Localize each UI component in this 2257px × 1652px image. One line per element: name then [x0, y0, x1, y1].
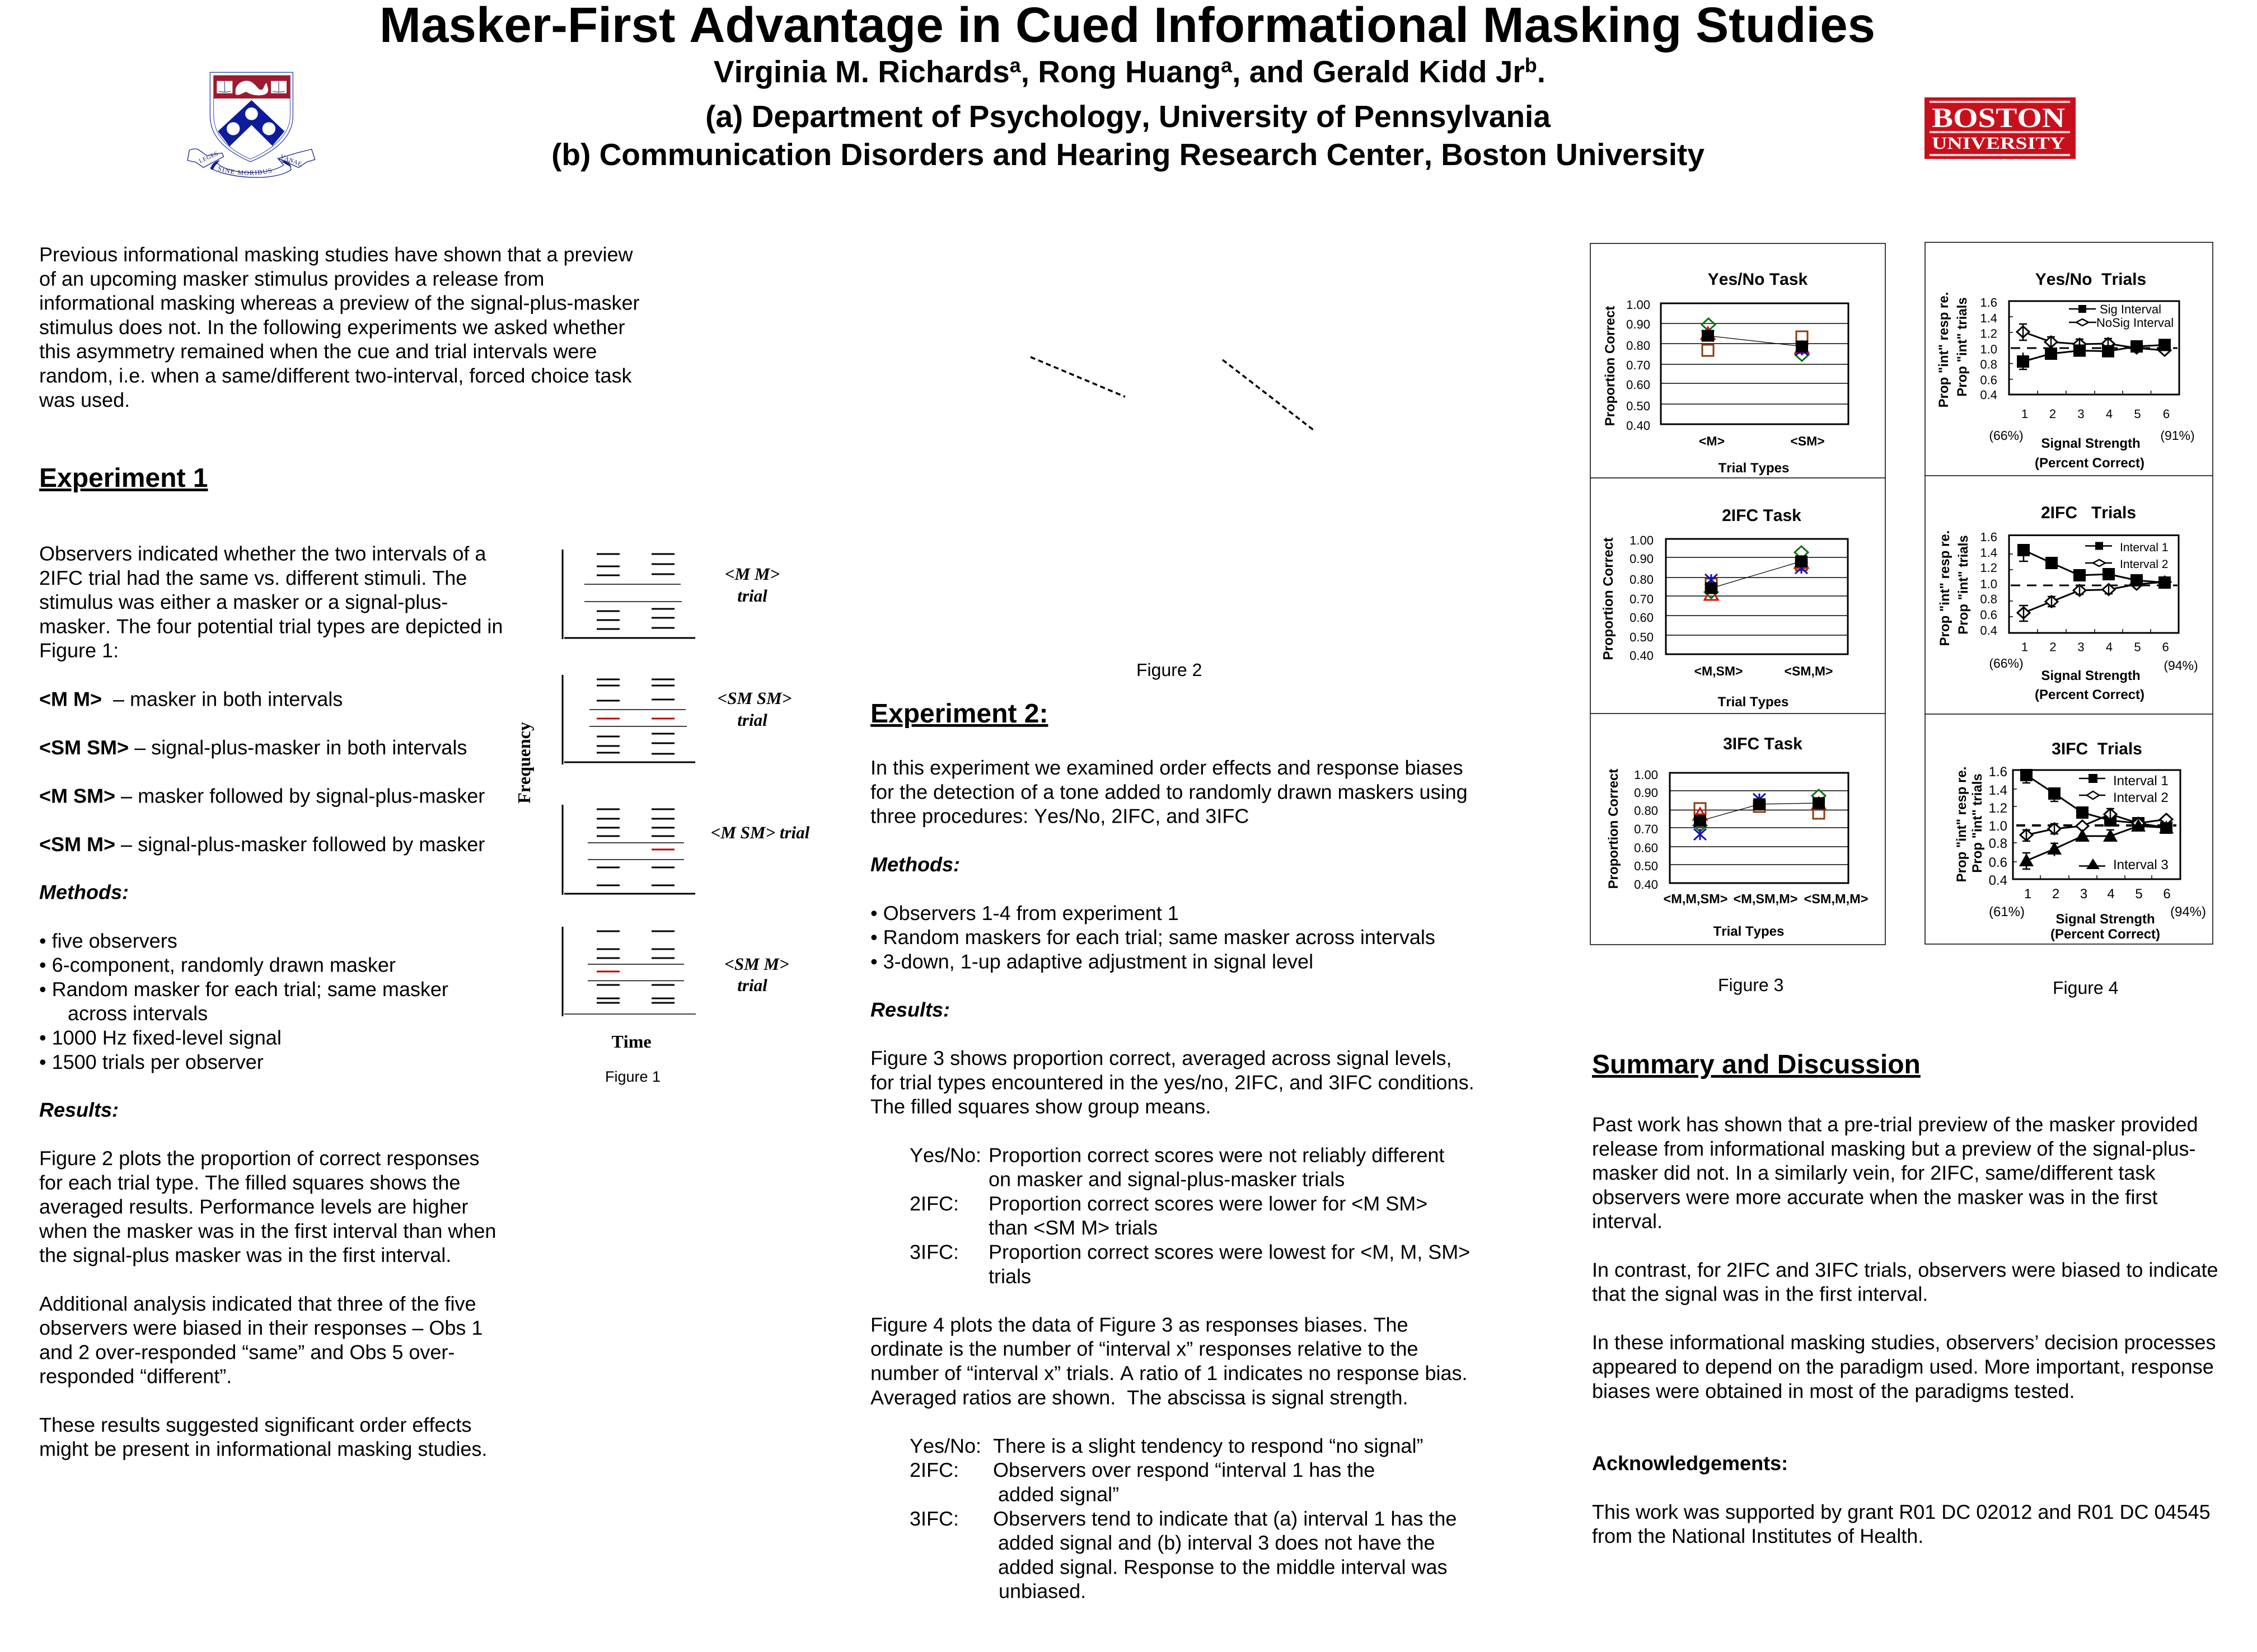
legend: Interval 1 [2120, 541, 2168, 554]
logo: University of Pennsylvania shield [187, 72, 316, 178]
text block: Experiment 2 results: unbiased. [999, 1580, 1086, 1603]
text block: Experiment 1 results: Results: [39, 1098, 119, 1121]
chart: 3IFC Task: 0.60 [1634, 841, 1658, 855]
chart: 2IFC Trials: 1 [2021, 640, 2028, 654]
chart: 3IFC Trials: 0.8 [1989, 836, 2007, 851]
chart: Yes/No Task: 0.60 [1626, 378, 1650, 392]
chart: Yes/No Trials: 1.2 [1980, 327, 1997, 340]
text block: Experiment 2 methods [870, 853, 1435, 973]
text block: Experiment 1 results: might be present in informational masking studies. [39, 1438, 487, 1461]
text block: Experiment 1 methods [39, 881, 448, 1073]
chart: 3IFC Task: <M,SM,M> [1734, 891, 1797, 906]
chart: 3IFC Task: 0.90 [1634, 786, 1658, 800]
chart: 3IFC Trials: 1.2 [1989, 801, 2007, 816]
text block: Experiment 2 results: Yes/No: [910, 1434, 981, 1457]
chart: Yes/No Task: 0.90 [1626, 317, 1650, 331]
logo: Boston University: BOSTON [1932, 102, 2065, 133]
text block: Experiment 1 description [39, 542, 503, 856]
chart: 2IFC Task: 0.60 [1629, 611, 1654, 625]
text block: summary: In contrast, for 2IFC and 3IFC trials, observers were biased to indicate [1592, 1258, 2218, 1281]
text block: summary: In these informational masking studies, observers’ decision processes [1592, 1331, 2216, 1354]
intro paragraph: this asymmetry remained when the cue and trial intervals were [39, 340, 597, 363]
chart: 3IFC Trials: (61%) [1989, 904, 2025, 919]
chart: Yes/No Trials: Yes/No Trials [2035, 270, 2146, 289]
figure 1: trial type schematic [514, 550, 810, 1052]
text block: Experiment 1 description: Figure 1: [39, 639, 119, 662]
legend: Interval 3 [2113, 857, 2169, 872]
text block: summary: observers were more accurate when the masker was in the first [1592, 1185, 2157, 1208]
chart: Yes/No Trials: (Percent Correct) [2035, 456, 2144, 471]
chart: 3IFC Task: <M,M,SM> [1664, 891, 1727, 906]
text block: summary: interval. [1592, 1210, 1663, 1233]
chart: 2IFC Trials: Prop "int" trials [1956, 535, 1971, 635]
chart: 2IFC Task: <M,SM> [1694, 664, 1743, 678]
chart: 3IFC Trials: 2 [2052, 886, 2059, 902]
chart: 3IFC Trials: (Percent Correct) [2050, 927, 2160, 942]
chart: 3IFC Trials: 0.6 [1989, 855, 2007, 870]
text block: Experiment 1 results: and 2 over-responded “same” and Obs 5 over- [39, 1340, 455, 1363]
text block: Experiment 1 description: <M M> – masker in both intervals [39, 687, 343, 710]
intro paragraph: Previous informational masking studies have shown that a preview [39, 243, 634, 266]
text block: Experiment 1 description: stimulus was either a masker or a signal-plus- [39, 590, 448, 613]
legend [2069, 302, 2174, 330]
chart: Yes/No Trials: 0.4 [1980, 388, 1997, 402]
panel: SM M trial: trial [737, 975, 767, 995]
text block: summary: release from informational masking but a preview of the signal-plus- [1592, 1137, 2196, 1160]
panel: SM M trial [563, 927, 789, 1016]
chart: 2IFC Trials: 0.4 [1980, 623, 1997, 637]
chart: Yes/No Task: 0.70 [1626, 358, 1650, 372]
chart: 2IFC Trials: 2 [2049, 640, 2057, 654]
text block: Experiment 2 results [870, 998, 1474, 1603]
chart: Yes/No Trials: 3 [2077, 407, 2085, 421]
chart: 2IFC Trials: Signal Strength [2041, 668, 2141, 683]
text block: Experiment 2 results: Observers over respond “interval 1 has the [993, 1458, 1375, 1481]
chart: Yes/No Trials: 6 [2163, 407, 2170, 421]
chart: Yes/No Task: 0.80 [1626, 339, 1650, 353]
text block: acknowledgements: This work was supported by grant R01 DC 02012 and R01 DC 04545 [1592, 1500, 2211, 1523]
authors: . [1537, 54, 1546, 89]
text block: Experiment 2 results: Observers tend to indicate that (a) interval 1 has the [993, 1507, 1457, 1530]
chart: 2IFC Trials: 2IFC Trials [2041, 504, 2136, 522]
text block: Experiment 2 description: In this experiment we examined order effects and response biases [870, 756, 1463, 779]
text block: summary: Past work has shown that a pre-trial preview of the masker provided [1592, 1113, 2198, 1136]
chart: 3IFC Task: Trial Types [1713, 924, 1784, 939]
chart: 3IFC Task [1606, 735, 1868, 939]
text block: Experiment 2 results: added signal and (b) interval 3 does not have the [998, 1531, 1435, 1554]
logo: University of Pennsylvania shield: LEGES [198, 150, 219, 164]
text block: Experiment 1 methods: • five observers [39, 929, 177, 952]
chart: Yes/No Task: Trial Types [1718, 461, 1789, 476]
panel: SM SM trial: <SM SM> [718, 688, 792, 708]
chart: 3IFC Task: 0.80 [1634, 804, 1658, 818]
chart: 3IFC Task: Proportion Correct [1606, 769, 1621, 889]
text block: acknowledgements [1592, 1452, 2211, 1547]
chart: Yes/No Trials: 4 [2106, 407, 2113, 421]
text block: Experiment 1 methods: • 1000 Hz fixed-level signal [39, 1026, 282, 1049]
caption: Figure 3: Figure 3 [1718, 975, 1783, 995]
chart: 3IFC Trials: 3IFC Trials [2052, 740, 2142, 758]
chart: 2IFC Task: 0.50 [1629, 630, 1654, 644]
chart: Yes/No Trials: (66%) [1989, 428, 2024, 443]
chart: 3IFC Task: 3IFC Task [1723, 735, 1802, 753]
chart: Yes/No Trials: 5 [2134, 407, 2141, 421]
chart: Yes/No Trials: 1 [2021, 407, 2028, 421]
intro paragraph: of an upcoming masker stimulus provides a release from [39, 267, 544, 290]
axis label: Time: Time [611, 1031, 652, 1052]
chart: Yes/No Task: <SM> [1790, 434, 1825, 448]
legend: Interval 1 [2113, 773, 2169, 789]
text block: Experiment 1 results: These results suggested significant order effects [39, 1413, 471, 1436]
chart: Yes/No Task: Yes/No Task [1708, 270, 1808, 289]
authors: Virginia M. Richards [714, 54, 1010, 89]
chart: Yes/No Trials: (91%) [2160, 428, 2195, 443]
chart: 3IFC Task: 0.40 [1634, 877, 1658, 891]
text block: Experiment 2 results: 2IFC: [910, 1192, 959, 1215]
logo: University of Pennsylvania shield: SINE MORIBUS [218, 167, 272, 175]
chart: 3IFC Trials: 5 [2135, 886, 2143, 902]
chart: 2IFC Trials: 5 [2134, 640, 2141, 654]
text block: Experiment 2 results: 2IFC: [910, 1458, 959, 1481]
text block: Experiment 1 results: for each trial type. The filled squares shows the [39, 1171, 460, 1194]
chart: Yes/No Trials: 1.4 [1980, 311, 1997, 325]
panel: M M trial [563, 550, 780, 639]
text block: Experiment 2 results: ordinate is the number of “interval x” responses relative to the [870, 1337, 1418, 1360]
text block: acknowledgements: Acknowledgements: [1592, 1452, 1788, 1475]
chart: 2IFC Task: 0.70 [1629, 592, 1654, 606]
caption: Figure 1: Figure 1 [605, 1068, 661, 1085]
text block: Experiment 2 results: Results: [870, 998, 950, 1021]
logo: Boston University: UNIVERSITY [1932, 133, 2065, 153]
text block: Experiment 2 methods: • 3-down, 1-up adaptive adjustment in signal level [870, 950, 1313, 973]
chart: 3IFC Trials: 4 [2107, 886, 2115, 902]
text block: Experiment 2 results: Proportion correct scores were not reliably different [989, 1143, 1444, 1166]
intro paragraph: stimulus does not. In the following experiments we asked whether [39, 316, 625, 339]
text block: Experiment 1 description: 2IFC trial had the same vs. different stimuli. The [39, 566, 467, 589]
text block: Experiment 2 results: Figure 3 shows proportion correct, averaged across signal levels, [870, 1046, 1452, 1069]
panel: M SM trial [563, 805, 810, 895]
text block: Experiment 2 results: Proportion correct scores were lower for <M SM> [989, 1192, 1427, 1215]
heading: Experiment 1: Experiment 1 [39, 463, 208, 493]
panel: SM SM trial [563, 675, 792, 764]
text block: Experiment 1 methods: • 6-component, randomly drawn masker [39, 954, 396, 977]
text block: Experiment 2 results: added signal. Response to the middle interval was [998, 1555, 1447, 1578]
chart: Yes/No Trials: 2 [2049, 407, 2056, 421]
text block: Experiment 2 description [870, 756, 1468, 828]
figure 4: response bias charts [1925, 242, 2213, 944]
chart: 3IFC Task: 0.50 [1634, 859, 1658, 873]
text block: Experiment 2 description: three procedures: Yes/No, 2IFC, and 3IFC [870, 805, 1249, 828]
chart: Yes/No Task: 1.00 [1626, 298, 1650, 312]
panel: M M trial: trial [737, 586, 767, 606]
chart: 2IFC Task: 1.00 [1629, 533, 1654, 547]
text block: Experiment 1 description: <M SM> – masker followed by signal-plus-masker [39, 785, 485, 807]
text block: Experiment 1 results: observers were biased in their responses – Obs 1 [39, 1316, 483, 1339]
text block: Experiment 1 methods: • 1500 trials per observer [39, 1050, 264, 1073]
text block: Experiment 1 results: Figure 2 plots the proportion of correct responses [39, 1147, 479, 1170]
chart: 3IFC Task: 0.70 [1634, 822, 1658, 836]
text block: Experiment 1 results [39, 1098, 496, 1461]
text block: Experiment 2 results: Averaged ratios are shown. The abscissa is signal strength. [870, 1386, 1408, 1409]
text block: Experiment 1 results: Additional analysis indicated that three of the five [39, 1292, 476, 1315]
text block: Experiment 1 results: the signal-plus masker was in the first interval. [39, 1243, 451, 1266]
text block: Experiment 1 description: Observers indicated whether the two intervals of a [39, 542, 486, 565]
chart: 2IFC Trials: (Percent Correct) [2035, 687, 2144, 702]
text block: Experiment 2 results: trials [989, 1265, 1031, 1288]
text block: Experiment 2 results: on masker and signal-plus-masker trials [989, 1168, 1345, 1191]
panel: M SM trial: <M SM> trial [711, 823, 810, 842]
legend: Sig Interval [2100, 302, 2161, 316]
legend [2079, 773, 2169, 872]
chart: 2IFC Trials: 1.0 [1980, 577, 1997, 591]
text block: Experiment 2 results: number of “interval x” trials. A ratio of 1 indicates no response bias. [870, 1362, 1468, 1385]
chart: 2IFC Trials: Prop "int" resp re. [1937, 531, 1952, 646]
affiliation a: (a) Department of Psychology, University of Pennsylvania [705, 99, 1551, 134]
chart: Yes/No Trials: Signal Strength [2041, 436, 2141, 451]
chart: 2IFC Trials: 1.6 [1980, 530, 1997, 544]
text block: Experiment 1 results: when the masker was in the first interval than when [39, 1219, 496, 1242]
chart: Yes/No Trials: 0.8 [1980, 357, 1997, 372]
text block: summary: that the signal was in the first interval. [1592, 1283, 1928, 1306]
chart: 2IFC Task: Proportion Correct [1601, 537, 1616, 660]
chart: Yes/No Trials: Prop "int" resp re. [1936, 292, 1951, 407]
text block: Experiment 2 results: than <SM M> trials [989, 1216, 1158, 1239]
heading: Experiment 2: Experiment 2: [870, 699, 1048, 729]
text block: acknowledgements: from the National Institutes of Health. [1592, 1524, 1923, 1547]
chart: Yes/No Trials: 1.0 [1980, 342, 1997, 356]
text block: Experiment 2 results: Figure 4 plots the data of Figure 3 as responses biases. The [870, 1313, 1408, 1336]
intro paragraph [39, 243, 639, 411]
text block: Experiment 1 methods: across intervals [68, 1002, 208, 1025]
panel: M M trial: <M M> [725, 564, 780, 584]
chart: 3IFC Trials: Signal Strength [2055, 912, 2155, 927]
text block: Experiment 2 results: 3IFC: [910, 1240, 959, 1264]
chart: 2IFC Task: 0.80 [1629, 572, 1654, 586]
intro paragraph: was used. [39, 388, 130, 411]
figure 2: dashed lines [1031, 357, 1313, 430]
chart: 3IFC Trials: 6 [2163, 886, 2171, 902]
chart: Yes/No Task: Proportion Correct [1603, 306, 1618, 426]
chart: Yes/No Trials: 0.6 [1980, 373, 1997, 387]
text block: Experiment 1 results: responded “different”. [39, 1365, 232, 1388]
text block: Experiment 2 results: added signal” [998, 1483, 1119, 1505]
chart: 2IFC Task: Trial Types [1718, 694, 1788, 710]
logo: University of Pennsylvania shield: VANAE [279, 153, 303, 167]
authors: a [1221, 54, 1233, 77]
caption: Figure 4: Figure 4 [2053, 978, 2118, 998]
chart: 2IFC Task: 0.90 [1629, 552, 1654, 566]
chart: 3IFC Trials: 1.6 [1989, 764, 2007, 780]
text block: Experiment 2 methods: • Random maskers for each trial; same masker across intervals [870, 926, 1435, 949]
chart: Yes/No Task: 0.50 [1626, 399, 1650, 413]
chart: Yes/No Task: 0.40 [1626, 419, 1650, 433]
text block: summary: masker did not. In a similarly vein, for 2IFC, same/different task [1592, 1161, 2156, 1184]
heading: Summary and Discussion: Summary and Discussion [1592, 1050, 1921, 1080]
caption: Figure 2: Figure 2 [1136, 660, 1202, 680]
logo: Boston University [1924, 97, 2076, 159]
text block: Experiment 2 description: for the detection of a tone added to randomly drawn maskers using [870, 780, 1468, 803]
text block: Experiment 2 results: Yes/No: [910, 1143, 981, 1166]
chart: Yes/No Trials: 1.6 [1980, 295, 1997, 309]
chart: 2IFC Task: 0.40 [1629, 649, 1654, 663]
chart: 3IFC Trials: Prop "int" trials [1970, 773, 1985, 873]
chart: 2IFC Trials: 3 [2077, 640, 2085, 654]
chart: 2IFC Trials: (66%) [1989, 656, 2024, 670]
legend: Interval 2 [2113, 790, 2169, 805]
text block: Experiment 2 results: The filled squares show group means. [870, 1095, 1211, 1118]
text block: Experiment 2 results: Proportion correct scores were lowest for <M, M, SM> [989, 1240, 1470, 1264]
panel: SM M trial: <SM M> [724, 954, 789, 974]
chart: 3IFC Trials: Prop "int" resp re. [1954, 767, 1969, 882]
chart: Yes/No Task: <M> [1699, 434, 1725, 448]
chart: 3IFC Trials: 3 [2080, 886, 2087, 902]
chart: 2IFC Trials: 6 [2162, 640, 2169, 654]
chart: Yes/No Trials: Prop "int" trials [1955, 297, 1970, 397]
text block: Experiment 2 results: for trial types encountered in the yes/no, 2IFC, and 3IFC conditions. [870, 1071, 1474, 1093]
chart: Yes/No Trials [1936, 270, 2195, 471]
chart: 2IFC Trials: 0.8 [1980, 592, 1997, 606]
chart: 2IFC Trials: (94%) [2164, 658, 2198, 673]
authors: b [1525, 54, 1537, 77]
text block: Experiment 1 description: <SM SM> – signal-plus-masker in both intervals [39, 736, 467, 759]
text block: Experiment 2 results: 3IFC: [910, 1507, 959, 1530]
chart: 3IFC Trials: (94%) [2170, 904, 2206, 919]
text block: summary [1592, 1113, 2218, 1402]
intro paragraph: random, i.e. when a same/different two-interval, forced choice task [39, 364, 633, 387]
authors: a [1010, 54, 1022, 77]
chart: 3IFC Task: 1.00 [1634, 768, 1658, 782]
chart: 3IFC Trials [1954, 740, 2206, 942]
legend [2085, 541, 2168, 571]
chart: 3IFC Trials: 0.4 [1989, 873, 2007, 888]
chart: 2IFC Trials: 0.6 [1980, 608, 1997, 622]
chart: 2IFC Trials: 1.2 [1980, 561, 1997, 575]
chart: 2IFC Task: <SM,M> [1785, 664, 1833, 678]
chart: 2IFC Task [1601, 506, 1848, 710]
legend: Interval 2 [2120, 558, 2168, 571]
chart: 3IFC Task: <SM,M,M> [1804, 891, 1868, 906]
panel: SM SM trial: trial [737, 710, 767, 730]
figure 3: proportion correct charts [1590, 243, 1885, 945]
chart: Yes/No Task [1603, 270, 1848, 476]
authors: , and Gerald Kidd Jr [1232, 54, 1525, 89]
text block: Experiment 1 description: <SM M> – signal-plus-masker followed by masker [39, 833, 485, 856]
chart: 2IFC Trials: 4 [2106, 640, 2113, 654]
text block: Experiment 1 methods: • Random masker for each trial; same masker [39, 978, 448, 1001]
text block: Experiment 1 description: masker. The four potential trial types are depicted in [39, 614, 503, 637]
text block: Experiment 2 methods: Methods: [870, 853, 960, 876]
chart: 2IFC Task: 2IFC Task [1722, 506, 1801, 525]
chart: 3IFC Trials: 1 [2024, 886, 2031, 902]
text block: Experiment 1 methods: Methods: [39, 881, 129, 904]
chart: 3IFC Trials: 1.0 [1989, 819, 2007, 834]
text block: summary: appeared to depend on the paradigm used. More important, response [1592, 1355, 2214, 1378]
text block: Experiment 2 methods: • Observers 1-4 from experiment 1 [870, 902, 1179, 924]
axis label: Frequency: Frequency [514, 722, 534, 804]
authors: , Rong Huang [1021, 54, 1221, 89]
chart: 2IFC Trials: 1.4 [1980, 546, 1997, 560]
chart: 3IFC Trials: 1.4 [1989, 783, 2007, 798]
chart: 2IFC Trials [1937, 504, 2198, 702]
legend: NoSig Interval [2096, 316, 2174, 330]
text block: Experiment 2 results: There is a slight tendency to respond “no signal” [993, 1434, 1423, 1457]
intro paragraph: informational masking whereas a preview of the signal-plus-masker [39, 292, 639, 315]
affiliation b: (b) Communication Disorders and Hearing Research Center, Boston University [551, 137, 1705, 172]
text block: Experiment 1 results: averaged results. Performance levels are higher [39, 1195, 468, 1218]
text block: summary: biases were obtained in most of the paradigms tested. [1592, 1379, 2075, 1402]
